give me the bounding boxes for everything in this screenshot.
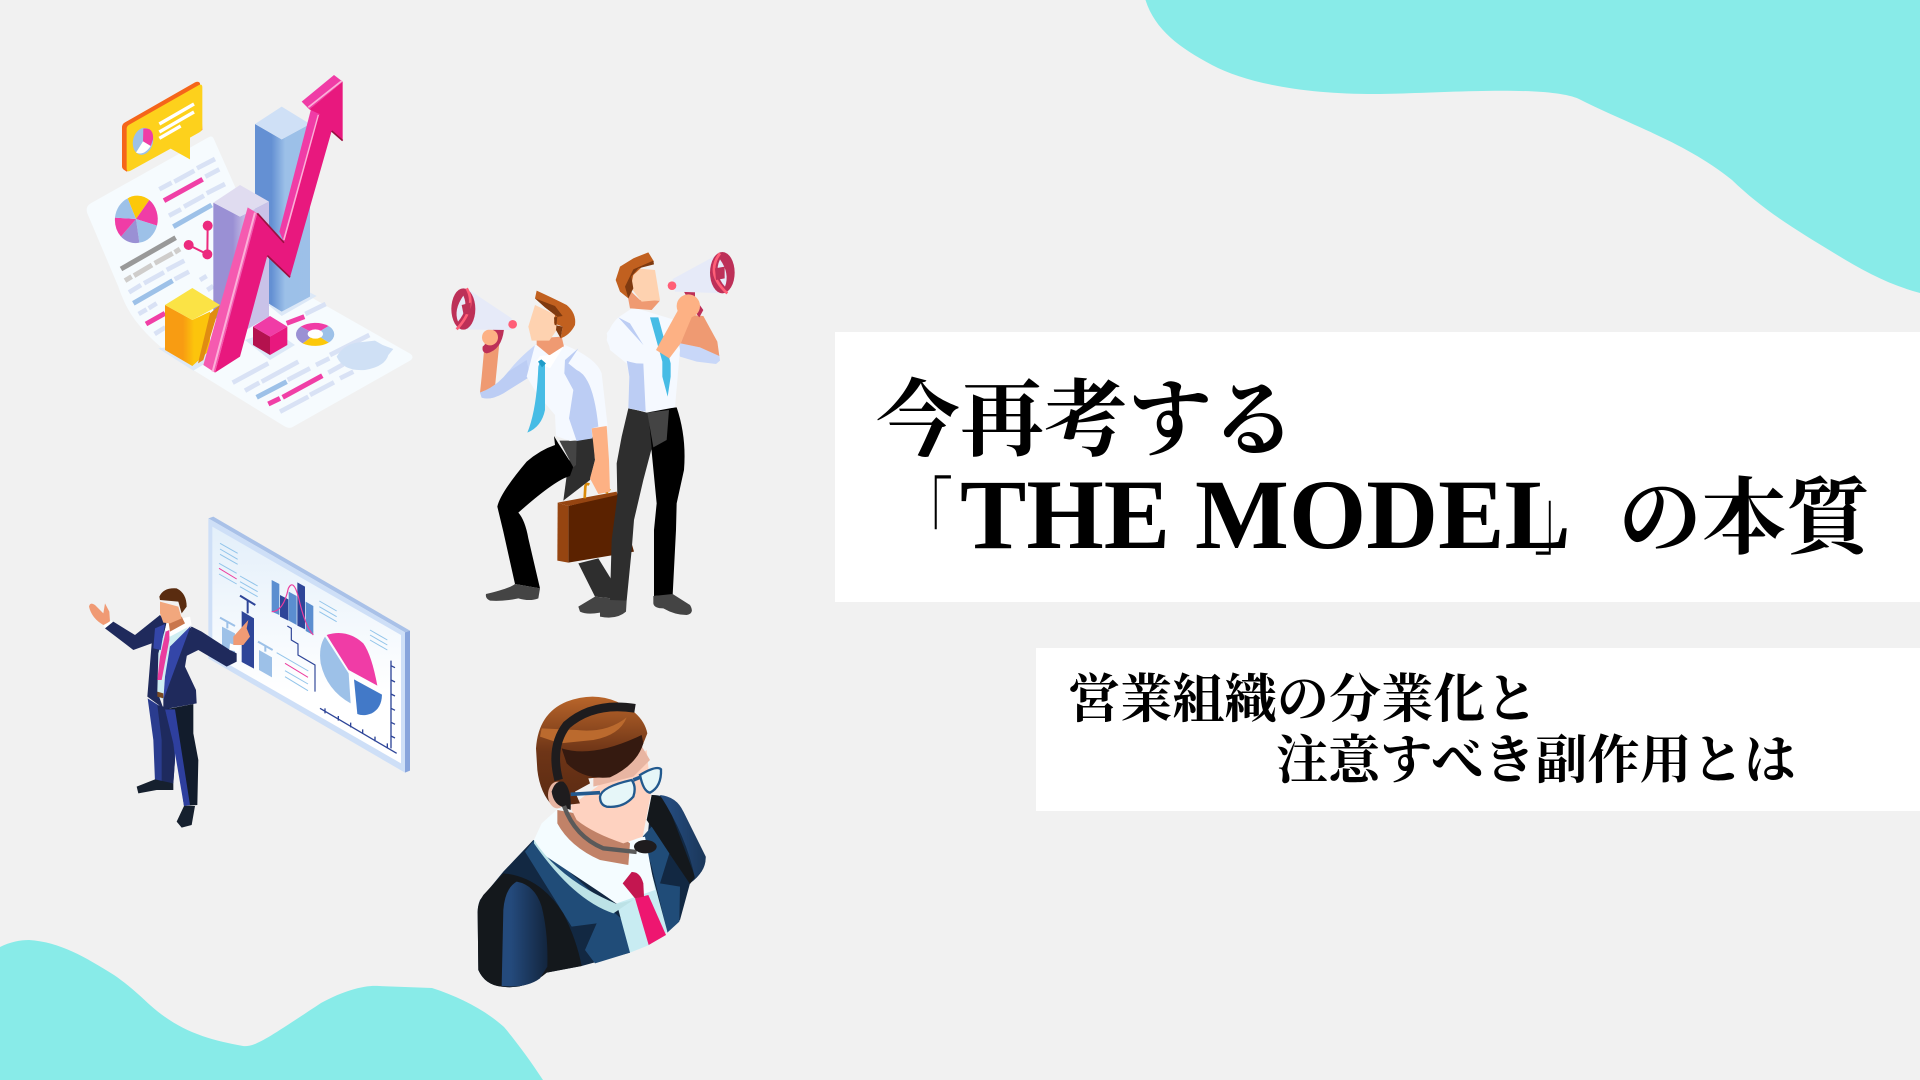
man right: forearm [656, 307, 693, 358]
operator: left shoulder and sleeve [478, 873, 582, 987]
operator: tie [623, 872, 666, 945]
man right: megaphone [668, 252, 735, 318]
presenter: shoes [137, 779, 195, 828]
board frame [208, 517, 410, 773]
man right: torso [607, 307, 680, 413]
presenter: head [159, 588, 187, 632]
operator: headset [552, 707, 657, 853]
operator: neck and face [557, 743, 651, 865]
subtitle [1068, 657, 1796, 793]
operator: jacket front [478, 827, 680, 987]
donut chart [296, 323, 334, 346]
pie chart on paper [115, 196, 158, 243]
man left: tie [527, 359, 546, 433]
board stepped line [287, 626, 315, 692]
board axes [320, 661, 397, 753]
board pie chart [320, 633, 382, 715]
teal shape: top right corner [1146, 0, 1920, 293]
presenter: left arm [89, 603, 162, 650]
title: THE MODEL [960, 459, 1571, 570]
man left: torso shirt [527, 345, 608, 441]
man left: trousers [497, 436, 595, 588]
rising arrow [203, 75, 343, 373]
illustration: isometric report with bar chart and rising arrow [87, 75, 413, 428]
tall blue bar [255, 107, 317, 316]
title: 」 [1534, 452, 1581, 572]
yellow bar [158, 288, 220, 371]
illustration: operator with headset [478, 697, 706, 987]
magenta cube [245, 316, 295, 360]
illustration: presenter at analytics board [89, 517, 410, 828]
teal shape: bottom left corner [0, 940, 543, 1080]
operator: right shoulder [630, 795, 706, 952]
man left: lower arm [590, 426, 610, 494]
man left: head [528, 291, 575, 368]
purple bar [213, 185, 269, 333]
man left: shoes [486, 584, 627, 618]
man right: shirt shading [618, 317, 646, 412]
presenter: trousers [148, 698, 198, 806]
man right: back sleeve and arm [670, 315, 720, 364]
man left: rear leg [578, 558, 612, 598]
pale map blob [337, 341, 393, 370]
node graph [185, 222, 212, 258]
report table rows [129, 159, 369, 412]
panel: subtitle background [1036, 648, 1920, 811]
man left: megaphone [451, 288, 517, 353]
man right: head [616, 252, 660, 310]
speech bubble with pie [122, 82, 202, 172]
operator: ear [548, 782, 567, 808]
man left: raised arm and sleeve [480, 340, 536, 399]
subtitle: 営業組織の分業化と [1068, 657, 1538, 732]
board column charts [220, 596, 273, 677]
title: 「 [902, 450, 952, 571]
board bar charts [272, 580, 313, 635]
report paper [87, 137, 413, 428]
man right: front sleeve [607, 317, 670, 364]
illustration: two businessmen with megaphones [451, 252, 735, 618]
man right: trousers [610, 407, 685, 601]
briefcase [557, 484, 634, 563]
title: 今再考する [876, 353, 1296, 474]
board text lines [219, 543, 387, 691]
man right: shoe [653, 594, 692, 615]
man left: shirt shading [564, 348, 598, 441]
panel: title background [835, 332, 1920, 602]
operator: shirt [534, 808, 667, 953]
title: の本質 [1618, 451, 1879, 572]
operator: glasses [571, 768, 661, 807]
title [876, 353, 1879, 572]
presenter: right arm and pointing hand [185, 620, 250, 667]
operator: hair [536, 697, 647, 807]
subtitle: 注意すべき副作用とは [1276, 718, 1796, 793]
man right: tie [650, 317, 671, 397]
presenter: shirt and jacket [147, 615, 197, 709]
